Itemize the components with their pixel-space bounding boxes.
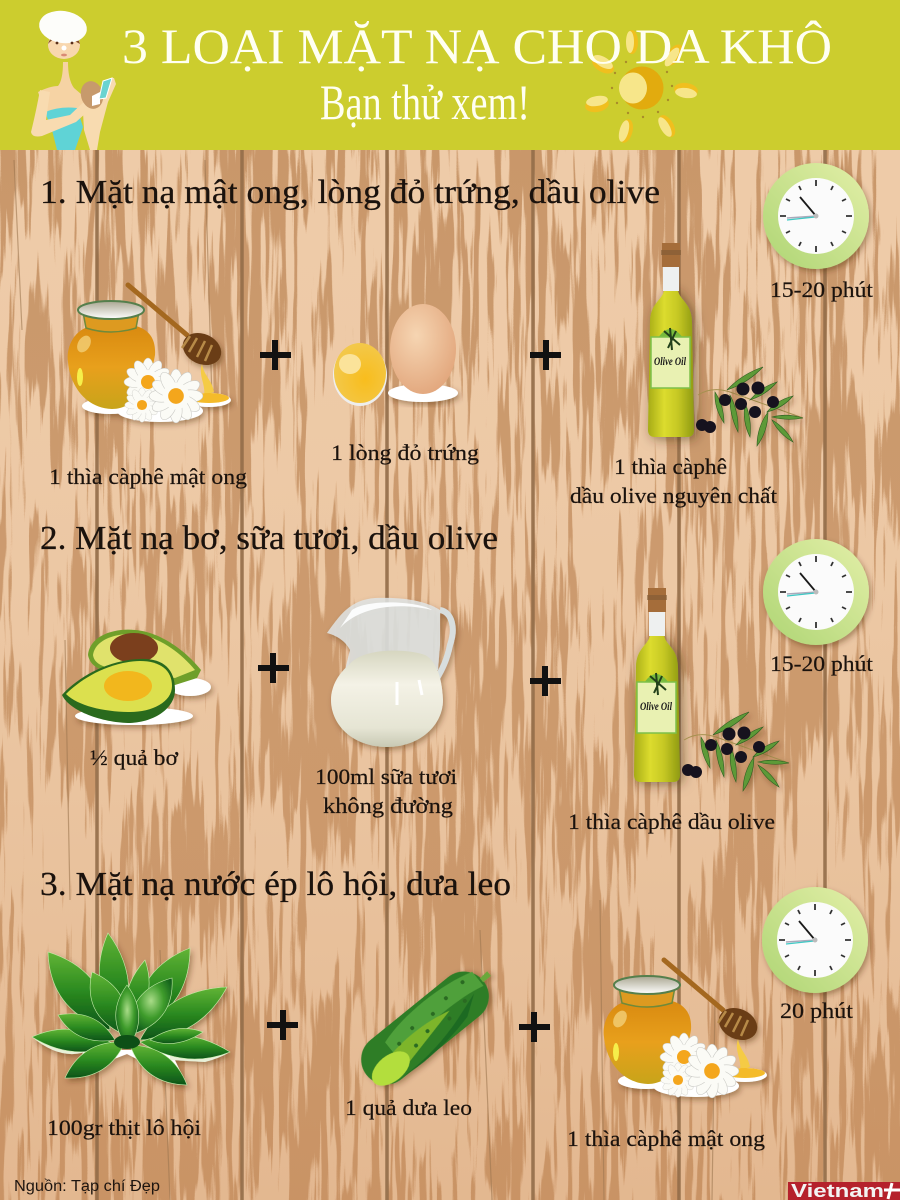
icon: cucumber [351,956,506,1095]
label: milk [315,764,457,818]
plus [258,653,289,683]
label: honey: 1 thìa càphê mật ong [567,1126,765,1151]
icon: avocado [62,630,211,725]
plus [267,1010,298,1040]
plus [530,340,561,370]
icon: clock [763,539,869,645]
icon: olive oil bottle: Olive Oil [640,699,672,713]
label: time: 20 phút [780,998,853,1023]
logo: Vietnam+ [788,1181,900,1200]
icon: honey jar [68,285,231,423]
icon: honey jar [604,960,767,1098]
plus [530,666,561,696]
label: time: 15-20 phút [770,277,873,302]
label: olive oil: 1 thìa càphê [614,454,727,479]
label: olive oil [570,454,777,508]
label: honey: 1 thìa càphê mật ong [49,464,247,489]
icon: woman with towel [31,8,116,150]
label: milk: 100ml sữa tươi [315,764,457,789]
icon: aloe vera [32,933,230,1085]
icon: clock [762,887,868,993]
label: aloe: 100gr thịt lô hội [47,1115,201,1140]
icon: egg and yolk [333,304,458,406]
heading: mask 3: 3. Mặt nạ nước ép lô hội, dưa leo [40,866,511,903]
plus [519,1012,550,1042]
label: time: 15-20 phút [770,651,873,676]
icon: clock [763,163,869,269]
heading: mask 2: 2. Mặt nạ bơ, sữa tươi, dầu olive [40,520,498,557]
icon: olive oil bottle: Olive Oil [654,354,686,368]
plus [260,340,291,370]
panel: mask 1 [40,163,873,508]
icon: milk jug [327,598,453,747]
panel: mask 3 [32,866,868,1151]
icon: olive oil bottle [648,243,803,446]
title: 3 LOẠI MẶT NẠ CHO DA KHÔ [122,18,832,74]
label: olive oil: 1 thìa càphê dầu olive [568,809,775,834]
label: cucumber: 1 quả dưa leo [345,1095,472,1120]
header band [0,0,900,150]
label: milk: không đường [323,793,453,818]
icon: olive oil bottle [634,588,789,791]
panel: mask 2 [40,520,873,834]
heading: mask 1: 1. Mặt nạ mật ong, lòng đỏ trứng, dầu olive [40,174,660,211]
label: egg yolk: 1 lòng đỏ trứng [331,440,479,465]
label: avocado: ½ quả bơ [90,745,178,770]
source credit: Nguồn: Tạp chí Đẹp [14,1178,160,1195]
label: olive oil: dầu olive nguyên chất [570,483,777,508]
icon: sun [584,30,699,144]
subtitle: Bạn thử xem! [320,74,530,130]
